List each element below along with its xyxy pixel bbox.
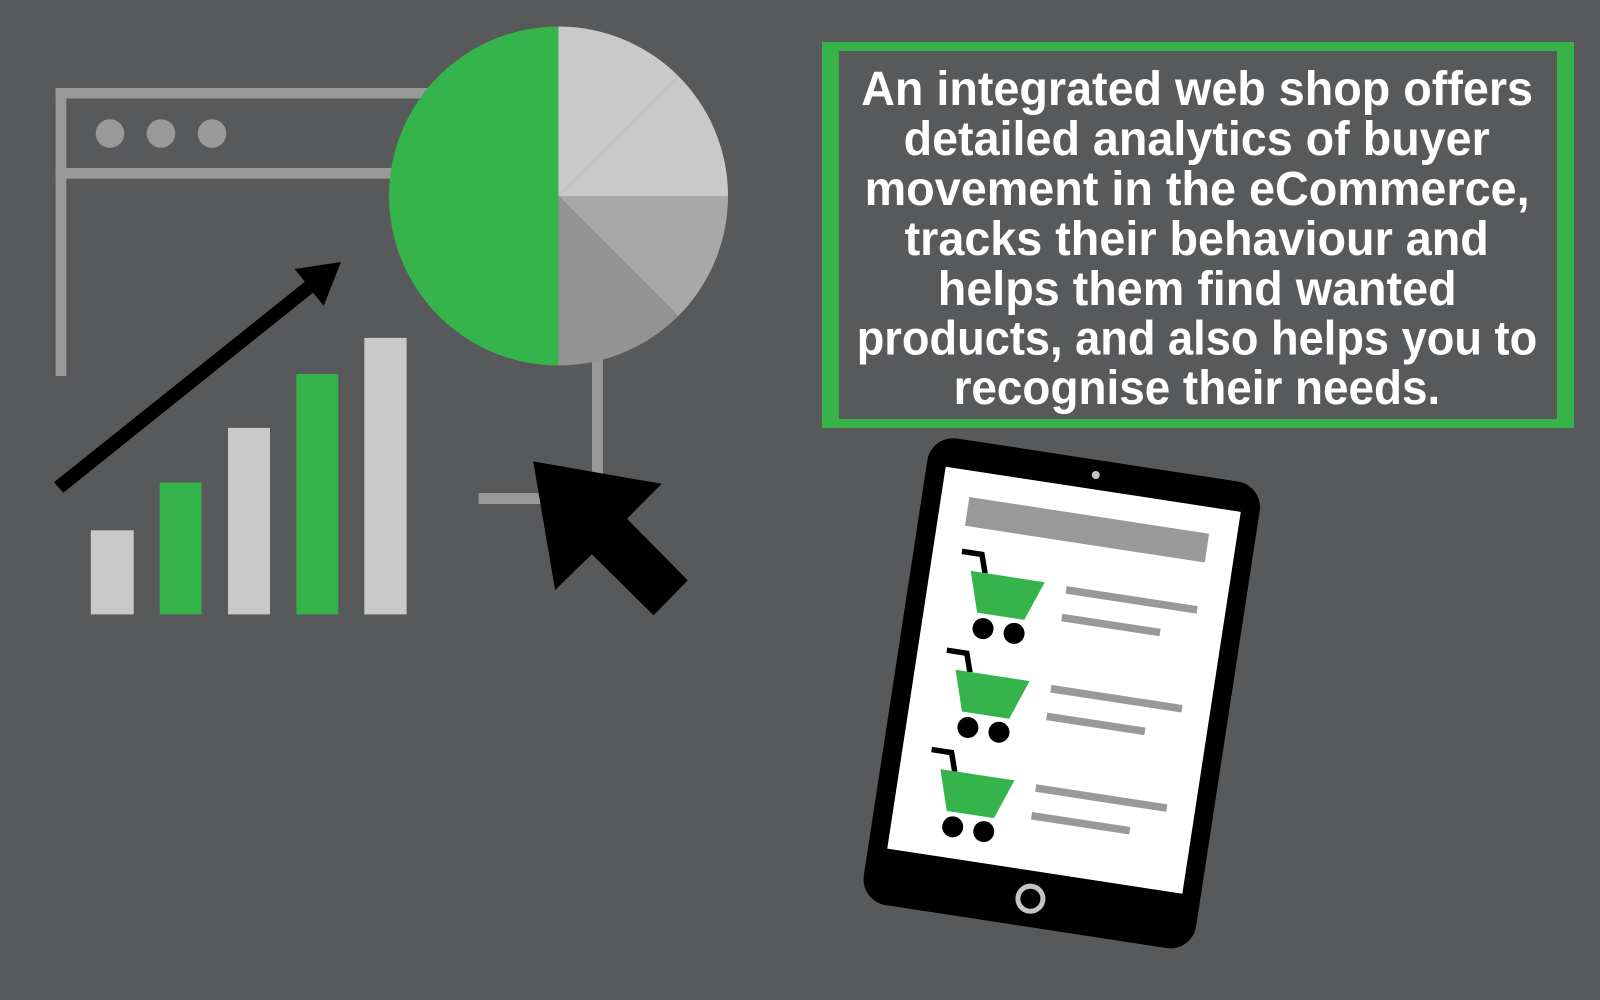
tablet (860, 435, 1264, 952)
pie chart (389, 26, 728, 366)
callout text: products, and also helps you to (857, 312, 1537, 366)
product row 1 (949, 551, 1200, 671)
tablet screen (887, 467, 1241, 894)
callout text: helps them find wanted (938, 263, 1457, 316)
bar chart (91, 338, 407, 614)
trend arrow (54, 262, 341, 493)
callout box (822, 42, 1574, 428)
callout text: movement in the eCommerce, (865, 163, 1530, 216)
callout text (857, 63, 1537, 415)
browser window outline with dots (56, 88, 603, 504)
cursor arrow (533, 461, 688, 615)
callout text: recognise their needs. (954, 362, 1440, 415)
tablet home button (1016, 884, 1045, 913)
callout text: tracks their behaviour and (905, 213, 1489, 266)
callout text: detailed analytics of buyer (904, 113, 1490, 166)
page header bar (965, 497, 1209, 563)
product row 2 (934, 650, 1185, 769)
callout text: An integrated web shop offers (861, 63, 1533, 116)
tablet camera (1091, 470, 1100, 480)
product row 3 (919, 750, 1170, 869)
